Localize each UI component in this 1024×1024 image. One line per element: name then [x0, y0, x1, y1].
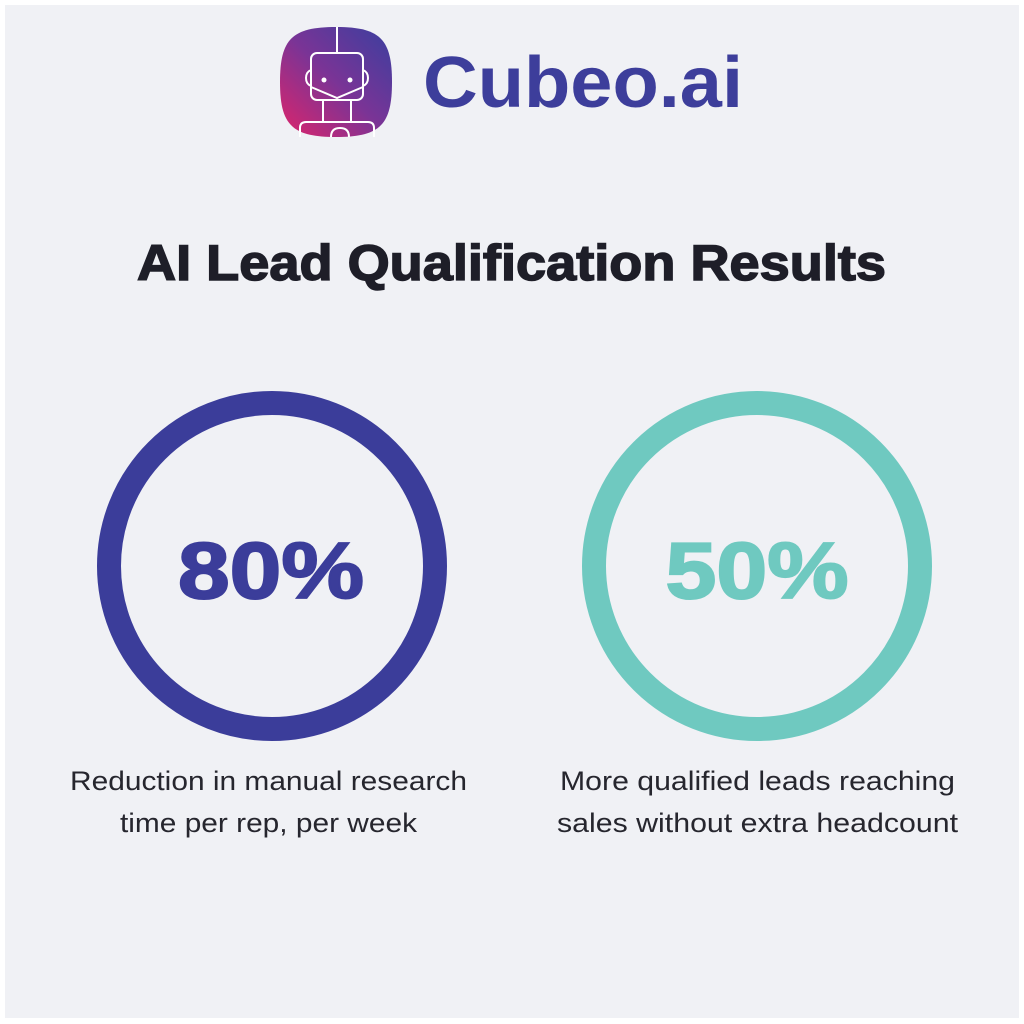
- ring 2: [594, 403, 920, 729]
- caption 2: More qualified leads reaching: [560, 766, 955, 796]
- title: AI Lead Qualification Results: [137, 235, 886, 291]
- ring 1: [109, 403, 435, 729]
- logo icon: [280, 27, 392, 137]
- stat 1: 80%: [70, 403, 467, 838]
- caption 1: Reduction in manual research: [70, 766, 467, 796]
- value 1: 80%: [178, 526, 364, 615]
- caption 1: time per rep, per week: [120, 808, 418, 838]
- stat 2: 50%: [557, 403, 959, 838]
- logo wordmark: Cubeo.ai: [423, 43, 743, 123]
- value 2: 50%: [666, 526, 848, 615]
- caption 2: sales without extra headcount: [557, 808, 959, 838]
